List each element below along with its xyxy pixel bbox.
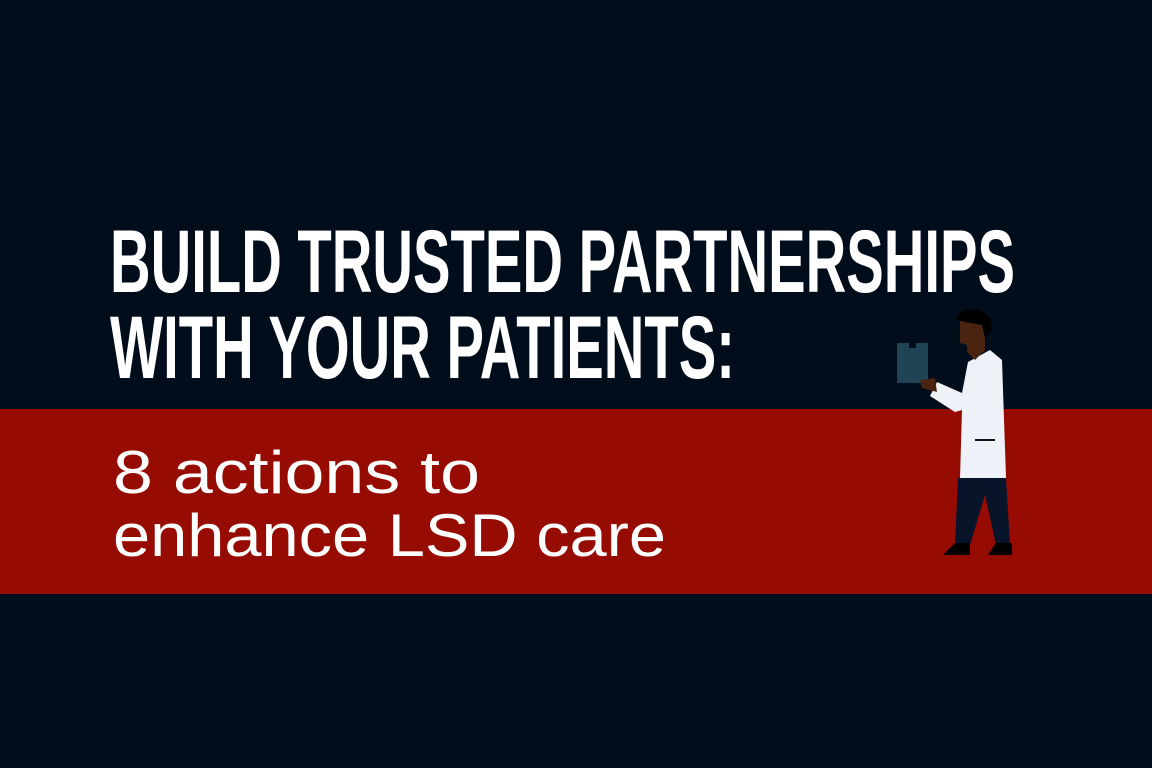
red band xyxy=(0,409,1152,594)
neck/face xyxy=(960,318,985,360)
hair xyxy=(957,310,992,338)
legs xyxy=(955,478,1010,545)
title xyxy=(110,211,1015,397)
icon: doctor with clipboard xyxy=(897,310,1012,555)
hand xyxy=(920,378,937,392)
title: WITH YOUR PATIENTS: xyxy=(110,297,735,397)
subtitle: enhance LSD care xyxy=(113,502,666,569)
subtitle xyxy=(113,439,666,569)
clipboard xyxy=(897,343,928,383)
subtitle: 8 actions to xyxy=(113,439,480,506)
coat xyxy=(930,350,1006,478)
shoes xyxy=(943,543,970,555)
